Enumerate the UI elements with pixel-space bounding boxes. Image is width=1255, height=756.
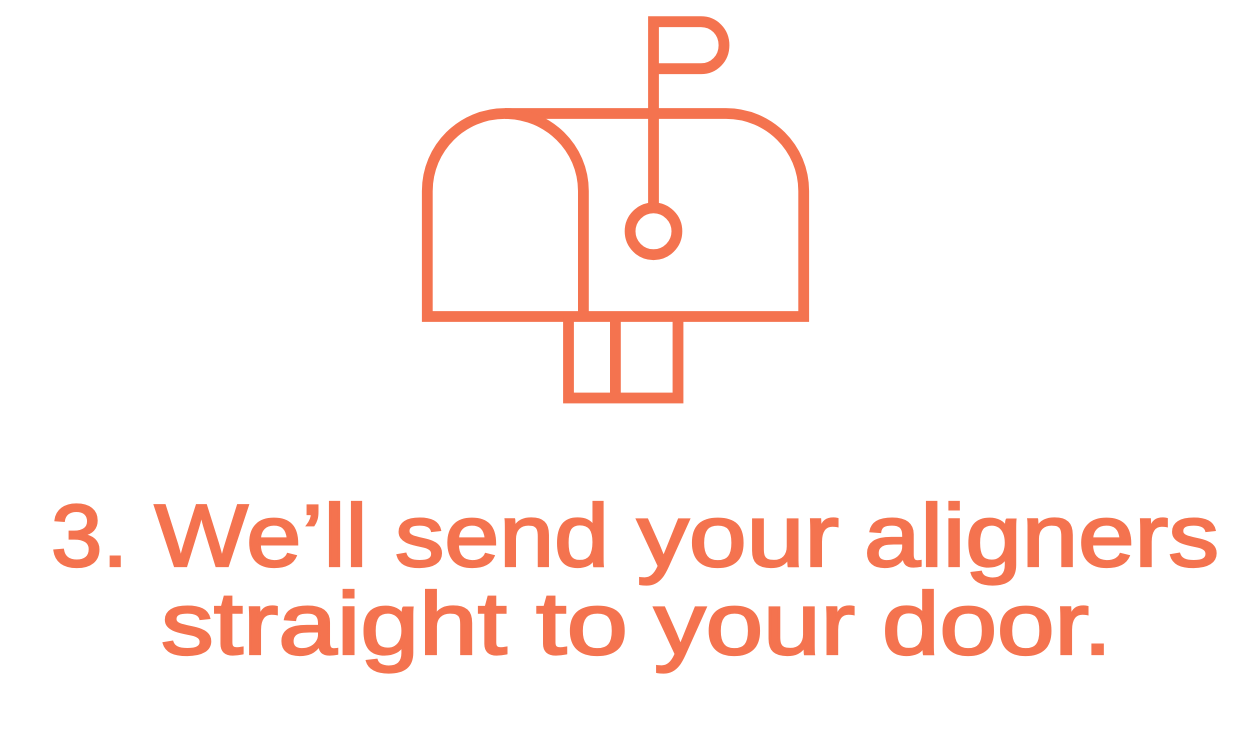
heading bbox=[51, 486, 1219, 673]
heading line 1: 3. bbox=[51, 486, 128, 585]
heading line 1 bbox=[51, 486, 1219, 585]
mailbox body bbox=[427, 114, 804, 316]
heading line 2: door. bbox=[882, 574, 1112, 673]
flag bbox=[654, 22, 724, 204]
icon: mailbox with flag bbox=[427, 22, 804, 398]
heading line 1: aligners bbox=[864, 486, 1219, 585]
heading line 1: send bbox=[395, 486, 609, 585]
flag pivot bbox=[630, 208, 677, 255]
heading line 2 bbox=[161, 574, 1112, 673]
heading line 2: your bbox=[654, 574, 855, 673]
heading line 1: We’ll bbox=[154, 486, 368, 585]
heading line 1: your bbox=[637, 486, 839, 585]
mailbox door bbox=[505, 114, 583, 316]
mailbox post bbox=[568, 317, 678, 398]
heading line 2: straight bbox=[161, 574, 507, 673]
heading line 2: to bbox=[536, 574, 628, 673]
